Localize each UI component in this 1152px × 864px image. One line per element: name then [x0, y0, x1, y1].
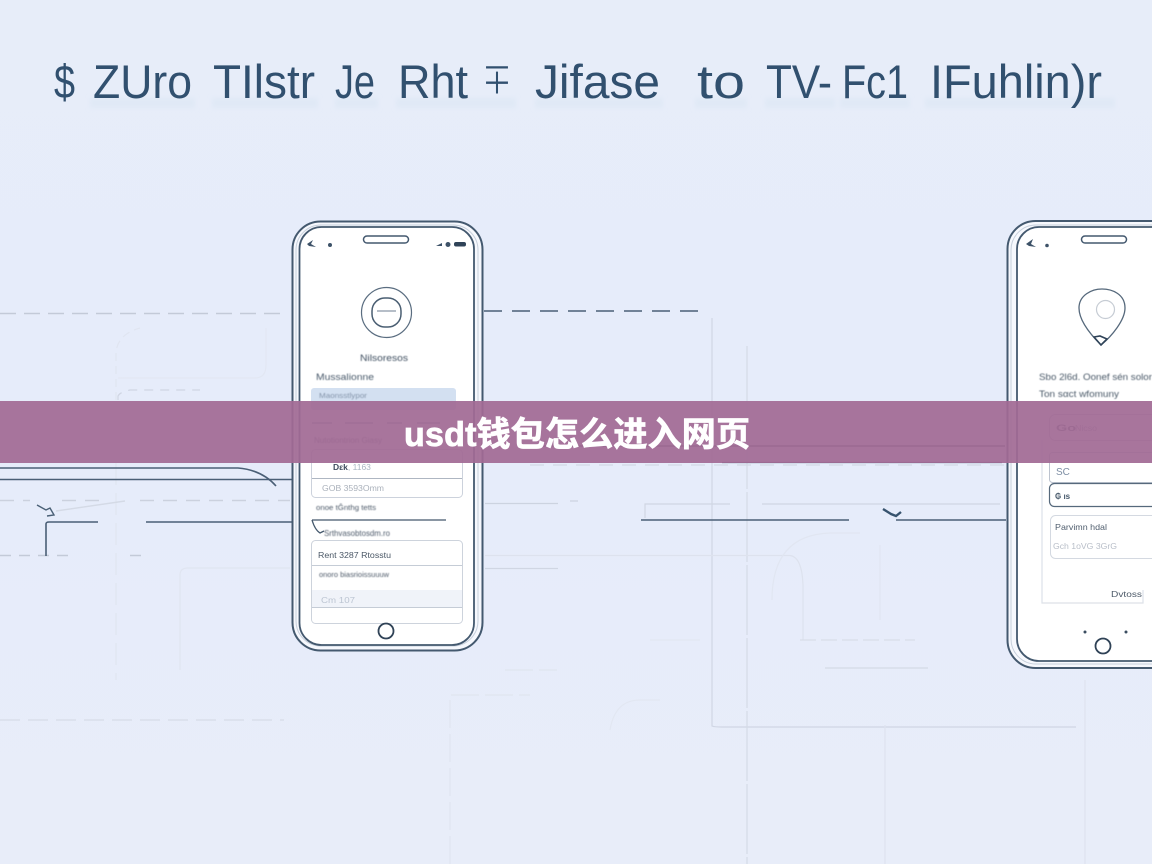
form row: selector — [1050, 484, 1152, 506]
banner — [0, 401, 1152, 463]
account name label: Nilsoresos — [360, 353, 409, 363]
home button — [378, 624, 394, 638]
phone frame — [1008, 221, 1152, 668]
title: Rht — [398, 55, 468, 108]
form row: code — [1050, 452, 1152, 482]
highlighted input: Maonsstlypor — [319, 391, 368, 400]
field label: Mussalionne — [316, 372, 374, 382]
confirm panel — [1042, 440, 1143, 603]
title: TIlstr — [213, 55, 315, 108]
dark connector lines right — [484, 311, 1006, 520]
section heading: Srthvasobtosdm.ro — [324, 528, 390, 538]
phone right — [1008, 221, 1152, 668]
form row: name — [1050, 414, 1152, 440]
form group 2: onoro biasrioissuuuw — [319, 570, 390, 579]
form row: selector: ₲ ıs — [1055, 492, 1071, 501]
title: ZUro — [93, 55, 192, 108]
form group: payment: Gch 1oVG 3GrG — [1053, 541, 1117, 551]
status bar — [307, 236, 466, 247]
form row: name: Nicso — [1075, 424, 1098, 433]
helper text: onoe tĜnthg tetts — [316, 503, 376, 512]
icon: left connector arrow — [37, 501, 125, 516]
form group 2: Rent 3287 Rtosstu — [318, 550, 391, 560]
title: $ — [54, 55, 75, 108]
title: to — [697, 55, 745, 108]
form group 2: Cm 107 — [321, 596, 356, 605]
title: ∓ — [482, 62, 512, 100]
title: Je — [335, 55, 375, 108]
title — [54, 55, 1102, 108]
description line 1: Sbo 2l6d. Oonef sén solor — [1039, 372, 1152, 382]
divider line with hook — [312, 520, 446, 533]
phone frame — [292, 222, 482, 650]
confirm panel: Dvtoss — [1111, 589, 1142, 599]
form row: name: Go — [1056, 423, 1077, 433]
dark connector lines left — [0, 468, 292, 556]
highlighted input — [311, 388, 456, 410]
phone left — [292, 222, 482, 650]
description line 2: Ton sαct wfomuny — [1039, 389, 1120, 399]
form row: code: SC — [1056, 467, 1070, 478]
faint background connector lines — [0, 314, 1085, 864]
dashed separator — [312, 422, 440, 424]
form group 1: GOB 3593Omm — [322, 483, 384, 493]
field label 2: Nutotiontrion Giasy — [314, 435, 383, 445]
form group: payment: Parvimn hdal — [1055, 522, 1107, 532]
title: TV- — [766, 55, 832, 108]
form group 2 — [312, 540, 462, 624]
title shadow blocks — [90, 98, 1115, 108]
title: IFuhlin)r — [930, 55, 1102, 108]
dots and home button — [1084, 630, 1128, 654]
icon: right connector arrow — [883, 509, 901, 516]
title: Jifase — [535, 55, 660, 108]
form group: payment — [1050, 516, 1152, 558]
avatar icon — [362, 288, 412, 338]
form group 1 — [312, 450, 462, 498]
status bar — [1026, 236, 1126, 247]
banner title: usdt钱包怎么进入网页 — [404, 416, 750, 454]
title: Fc1 — [842, 55, 908, 108]
form group 1: Dεk, 1163 — [333, 462, 371, 472]
shield pin icon — [1079, 289, 1125, 345]
